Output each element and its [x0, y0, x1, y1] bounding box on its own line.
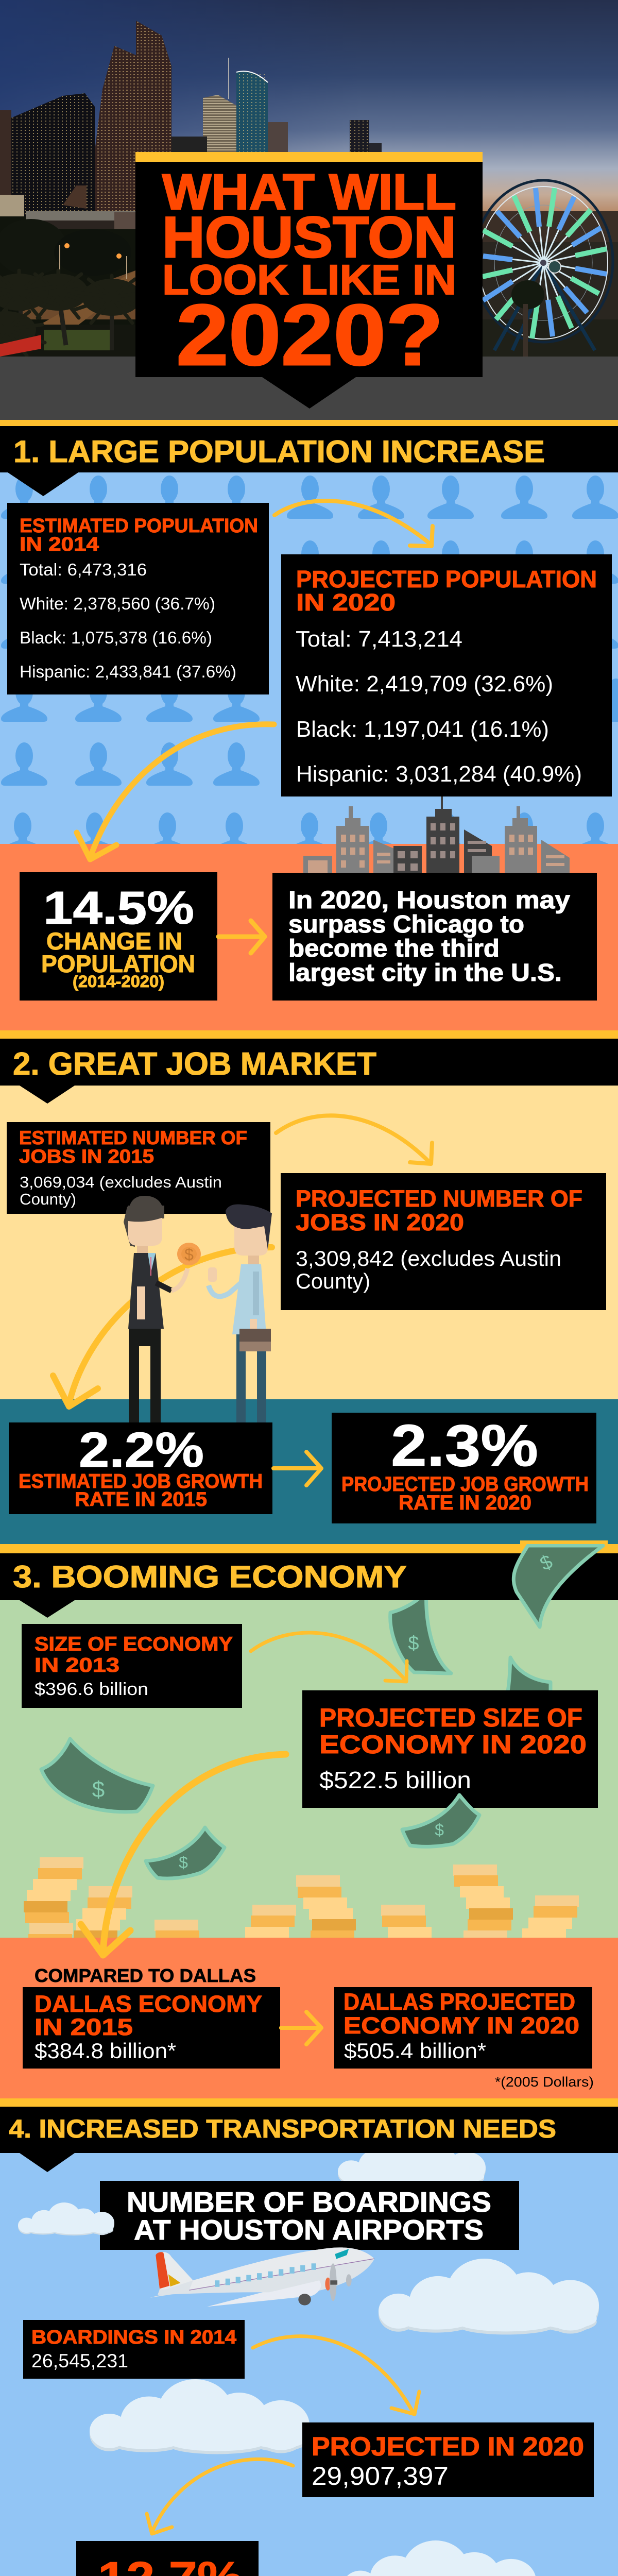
box: projected population 2020: Black: 1,197,041 (16.1%)	[296, 717, 549, 742]
box: number of boardings heading	[100, 2181, 519, 2250]
section 1 heading	[0, 420, 618, 496]
cloud: lower right	[343, 2540, 536, 2576]
box: estimated population 2014: IN 2014	[20, 534, 99, 555]
arrow: right	[273, 1452, 321, 1485]
box: 2.3%: PROJECTED JOB GROWTH	[341, 1473, 589, 1496]
box: number of boardings heading: NUMBER OF BOARDINGS	[127, 2186, 491, 2218]
arrow: down to growth rate	[53, 1247, 272, 1406]
box: projected size of economy 2020: PROJECTED SIZE OF	[319, 1703, 582, 1732]
arrow: down to change	[77, 724, 274, 859]
box: 2.3%: RATE IN 2020	[399, 1492, 531, 1514]
cloud: middle	[90, 2379, 310, 2454]
arrow: 2013 to 2020	[251, 1633, 407, 1682]
box: estimated population 2014: Total: 6,473,316	[20, 560, 147, 579]
icon: money bill over box: $	[435, 1821, 444, 1839]
box: 2.2%: RATE IN 2015	[75, 1488, 207, 1511]
box: projected population 2020: IN 2020	[296, 589, 396, 616]
box: Dallas economy 2015: IN 2015	[35, 2014, 133, 2040]
box: size of economy 2013	[22, 1624, 242, 1708]
box: projected population 2020: Hispanic: 3,031,284 (40.9%)	[296, 761, 582, 787]
box: projected 2020 boardings: 29,907,397	[312, 2462, 449, 2490]
box: Dallas projected economy 2020: DALLAS PROJECTED	[344, 1989, 575, 2015]
box: boardings 2014	[23, 2320, 245, 2379]
section 1 heading: 1. LARGE POPULATION INCREASE	[13, 434, 545, 469]
box: projected jobs 2020: JOBS IN 2020	[296, 1209, 464, 1235]
box: estimated jobs 2015: 3,069,034 (excludes Austin	[20, 1173, 222, 1191]
box: estimated jobs 2015: County)	[20, 1190, 76, 1208]
box: Dallas projected economy 2020	[334, 1987, 592, 2069]
box: projected jobs 2020: County)	[296, 1269, 370, 1293]
box: estimated population 2014: Black: 1,075,378 (16.6%)	[20, 628, 212, 647]
section 2 heading	[0, 1030, 618, 1104]
box: 14.5% change: (2014-2020)	[73, 972, 164, 991]
arrow: right	[218, 921, 265, 953]
box: size of economy 2013: SIZE OF ECONOMY	[35, 1633, 233, 1655]
arrow: jobs 2015 to 2020	[276, 1115, 432, 1164]
people icon pattern	[0, 476, 618, 856]
icon: money bill on heading	[513, 1540, 608, 1627]
section 2 heading: 2. GREAT JOB MARKET	[13, 1046, 376, 1082]
ground behind wheel	[483, 211, 618, 357]
box: projected population 2020: Total: 7,413,214	[296, 626, 462, 652]
icon: money bill over box	[402, 1795, 479, 1846]
box: Dallas economy 2015	[23, 1987, 280, 2069]
box: 2.2%: 2.2%	[79, 1422, 204, 1478]
box: estimated population 2014: ESTIMATED POPULATION	[20, 515, 258, 537]
box: projected size of economy 2020	[302, 1690, 598, 1808]
section 4 heading	[0, 2098, 618, 2172]
box: Chicago statement	[272, 873, 597, 1001]
box: projected population 2020	[281, 554, 612, 796]
box: 2.2%: ESTIMATED JOB GROWTH	[19, 1470, 263, 1493]
box: estimated population 2014: Hispanic: 2,433,841 (37.6%)	[20, 662, 236, 681]
box: Chicago statement: largest city in the U.S.	[288, 959, 562, 987]
box: projected size of economy 2020: ECONOMY IN 2020	[319, 1730, 587, 1759]
section 4: increased transportation needs	[0, 2138, 618, 2576]
cloud: left	[18, 2202, 114, 2235]
box: Chicago statement: In 2020, Houston may	[288, 887, 570, 914]
box: number of boardings heading: AT HOUSTON AIRPORTS	[134, 2214, 484, 2246]
footnote: 2005 dollars: *(2005 Dollars)	[495, 2074, 594, 2090]
box: projected 2020 boardings: PROJECTED IN 2020	[312, 2432, 584, 2461]
box: estimated jobs 2015: ESTIMATED NUMBER OF	[19, 1127, 247, 1148]
man with coin	[124, 1196, 201, 1423]
section 2: great job market	[0, 1086, 618, 1544]
box: 14.5% change: CHANGE IN	[46, 927, 182, 955]
icon: city skyline	[303, 796, 570, 873]
box: boardings 2014: 26,545,231	[31, 2350, 128, 2371]
section 3 heading	[0, 1540, 618, 1627]
box: estimated jobs 2015: JOBS IN 2015	[19, 1146, 154, 1167]
cloud behind heading	[338, 2138, 486, 2187]
arrow: 2014 to 2020	[274, 501, 433, 546]
section 3: booming economy	[0, 1591, 618, 2098]
arrow: 2014 to 2020	[253, 2336, 419, 2414]
title card: WHAT WILL	[162, 164, 456, 220]
label: compared to Dallas: COMPARED TO DALLAS	[35, 1965, 256, 1986]
title card: LOOK LIKE IN	[162, 257, 456, 303]
arrow: down to increase	[147, 2459, 293, 2534]
box: size of economy 2013: $396.6 billion	[35, 1680, 148, 1699]
box: Dallas economy 2015: $384.8 billion*	[35, 2039, 176, 2063]
box: 2.3%: 2.3%	[391, 1413, 538, 1479]
man with briefcase	[208, 1205, 272, 1423]
box: estimated population 2014: White: 2,378,560 (36.7%)	[20, 594, 215, 613]
icon: money bills	[41, 1591, 551, 1878]
box: size of economy 2013: IN 2013	[35, 1654, 119, 1676]
box: 12.7% increase	[76, 2541, 259, 2576]
box: estimated population 2014	[7, 503, 269, 694]
illustration: two businessmen	[124, 1196, 272, 1423]
box: Dallas projected economy 2020: $505.4 billion*	[344, 2039, 486, 2063]
box: Dallas economy 2015: DALLAS ECONOMY	[35, 1991, 262, 2017]
arrow: down to Dallas	[81, 1754, 286, 1955]
box: projected population 2020: White: 2,419,709 (32.6%)	[296, 671, 553, 697]
box: 2.3%	[332, 1413, 596, 1523]
title card: HOUSTON	[162, 205, 456, 269]
gray band below hero	[0, 357, 618, 420]
box: 14.5% change: 14.5%	[43, 883, 194, 934]
box: projected jobs 2020: 3,309,842 (excludes Austin	[296, 1246, 561, 1270]
coin dollar sign: $	[184, 1245, 194, 1264]
section 3 heading: 3. BOOMING ECONOMY	[13, 1560, 407, 1594]
box: boardings 2014: BOARDINGS IN 2014	[31, 2327, 236, 2348]
box: projected 2020 boardings	[302, 2422, 594, 2497]
section 4 heading: 4. INCREASED TRANSPORTATION NEEDS	[9, 2114, 556, 2143]
title card: 2020?	[176, 286, 443, 383]
coin stacks	[24, 1857, 579, 1945]
icon: money bills: $	[92, 1777, 105, 1802]
section 1: large population increase	[0, 472, 618, 1030]
box: Chicago statement: become the third	[288, 935, 500, 962]
icon: airplane	[150, 2247, 374, 2307]
box: projected size of economy 2020: $522.5 billion	[319, 1767, 471, 1793]
box: 14.5% change: POPULATION	[41, 950, 195, 977]
box: projected population 2020: PROJECTED POPULATION	[296, 566, 597, 592]
box: estimated jobs 2015	[7, 1122, 270, 1214]
arrow: right	[281, 2012, 321, 2044]
box: projected jobs 2020: PROJECTED NUMBER OF	[296, 1185, 582, 1212]
icon: money bills: $	[179, 1853, 188, 1872]
hero: Houston skyline photo	[0, 0, 618, 357]
box: Chicago statement: surpass Chicago to	[288, 911, 524, 938]
title card	[135, 152, 483, 409]
cloud: right	[379, 2259, 599, 2334]
box: Dallas projected economy 2020: ECONOMY IN 2020	[344, 2012, 579, 2039]
box: 14.5% change	[20, 872, 217, 1001]
box: projected jobs 2020	[281, 1173, 606, 1310]
icon: money bills: $	[408, 1633, 419, 1654]
box: 2.2%	[9, 1422, 272, 1514]
icon: Ferris wheel	[474, 180, 613, 350]
icon: money bill on heading: $	[537, 1551, 556, 1575]
